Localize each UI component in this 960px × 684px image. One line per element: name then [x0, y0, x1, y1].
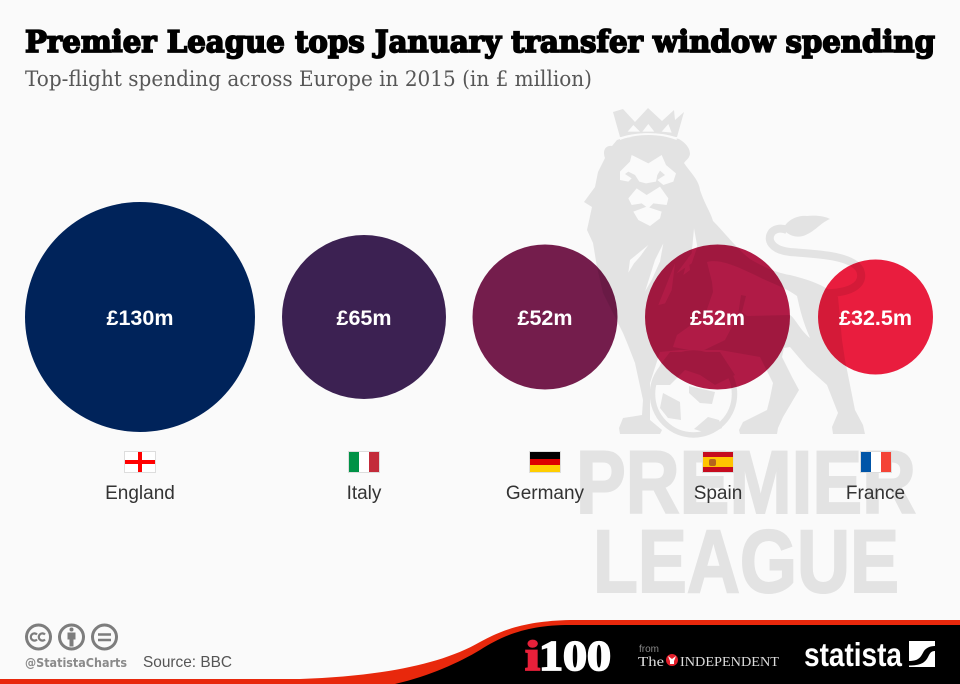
flag: Spain — [702, 451, 734, 473]
bubble: Germany: £52m — [518, 306, 572, 330]
football — [652, 352, 735, 435]
flag: France — [860, 451, 892, 473]
lion silhouette — [584, 108, 865, 434]
logo: from The Independent — [638, 644, 779, 670]
bubble: France — [818, 260, 933, 374]
logo: from The Independent: INDEPENDENT — [680, 655, 779, 670]
logo: from The Independent: The — [638, 655, 664, 670]
logo: from The Independent: from — [639, 644, 659, 655]
logo: i100: 100 — [539, 634, 611, 680]
bubble: Spain: £52m — [690, 306, 745, 330]
flag: Italy — [348, 451, 380, 473]
icon: creative commons licence — [26, 625, 116, 649]
flag: Germany — [529, 451, 561, 473]
handle: @StatistaCharts — [25, 656, 127, 670]
bubble: France: £32.5m — [839, 306, 912, 330]
gap between body and foreleg — [673, 261, 810, 352]
source: Source: BBC — [143, 654, 232, 671]
label: Germany: Germany — [506, 483, 585, 504]
logo: statista: statista — [804, 636, 903, 673]
footer band — [0, 620, 960, 684]
bubble: Germany — [472, 244, 618, 390]
subtitle: Top-flight spending across Europe in 2015 (in £ million) — [25, 67, 592, 91]
logo wordmark: LEAGUE — [593, 511, 899, 611]
bubble: England — [25, 202, 255, 432]
logo wordmark — [576, 432, 916, 611]
bubble: Italy — [282, 235, 446, 399]
label: England: England — [105, 483, 175, 504]
label: France: France — [846, 483, 905, 504]
title: Premier League tops January transfer window spending — [25, 25, 935, 60]
bubble: Italy: £65m — [336, 306, 392, 330]
logo: i100: i — [525, 634, 540, 680]
bubble: England: £130m — [107, 306, 173, 330]
bubble: Spain — [645, 244, 790, 390]
lion face and mane details — [620, 124, 697, 305]
label: Spain: Spain — [694, 483, 742, 504]
flag: England — [124, 451, 156, 473]
label: Italy: Italy — [347, 483, 382, 504]
watermark: Premier League logo — [576, 108, 916, 611]
